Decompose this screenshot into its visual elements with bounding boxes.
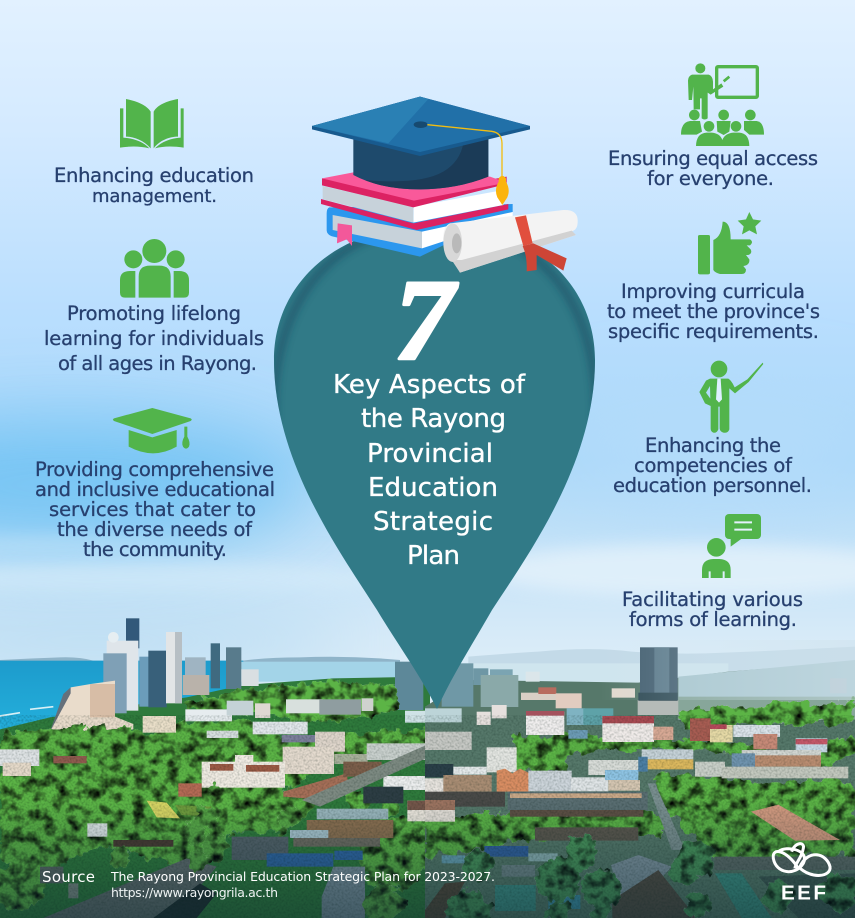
logo: EEF [773, 844, 830, 904]
text: promoting lifelong learning: of all ages in Rayong. [58, 352, 257, 375]
red ribbon [523, 243, 567, 271]
icon: teacher with audience [681, 63, 764, 147]
text: improving curricula: to meet the province's [607, 300, 820, 323]
text: comprehensive educational services: Providing comprehensive [35, 458, 274, 481]
text: improving curricula: specific requirements. [608, 320, 819, 343]
icon: graduation cap [113, 408, 192, 453]
right column [607, 63, 820, 631]
text: promoting lifelong learning [44, 302, 264, 375]
source note: Source [42, 868, 95, 886]
tassel [427, 125, 502, 177]
pin title [333, 370, 526, 571]
bottom trees [446, 837, 855, 918]
text: improving curricula [607, 280, 820, 343]
blue book [327, 204, 513, 257]
pin title: Strategic [373, 507, 493, 537]
text: comprehensive educational services: the diverse needs of [57, 518, 253, 541]
pin title: Plan [407, 541, 460, 571]
cap base [353, 138, 488, 189]
pin title: the Rayong [361, 404, 506, 434]
text: facilitating learning [622, 588, 803, 631]
pin title: Key Aspects of [333, 370, 526, 400]
panel: central map pin [274, 225, 596, 709]
text: enhancing competencies [613, 434, 812, 497]
near buildings [143, 716, 176, 733]
pink book [321, 172, 508, 230]
text: ensuring equal access [608, 147, 818, 190]
text: enhancing competencies: competencies of [634, 454, 793, 477]
text: promoting lifelong learning: learning for individuals [44, 327, 264, 350]
text: enhancing competencies: Enhancing the [645, 434, 781, 457]
text: enhancing competencies: education personnel. [613, 474, 812, 497]
illustration: cap, books and diploma [312, 97, 578, 273]
source note: The Rayong Provincial Education Strategic Plan for 2023-2027. [110, 869, 495, 884]
icon: open book [120, 99, 184, 148]
near trees [109, 785, 404, 918]
text: facilitating learning: forms of learning. [629, 608, 797, 631]
text: promoting lifelong learning: Promoting lifelong [67, 302, 241, 325]
right half of the city [425, 647, 855, 918]
text: facilitating learning: Facilitating various [622, 588, 803, 611]
icon: thumbs up with star [698, 212, 761, 274]
far tree line [0, 682, 437, 912]
text: enhancing education management [54, 164, 254, 207]
text: comprehensive educational services: services that cater to [49, 498, 256, 521]
city photo [0, 618, 855, 918]
mid and far trees [425, 700, 855, 858]
pin title: Provincial [367, 439, 493, 469]
pin title: Education [368, 473, 498, 503]
text: ensuring equal access: for everyone. [647, 167, 774, 190]
source note: https://www.rayongrila.ac.th [111, 885, 278, 900]
left half of the city [0, 618, 437, 918]
text: enhancing education management: management. [92, 186, 217, 207]
text: comprehensive educational services [35, 458, 275, 561]
icon: instructor with pointer [699, 361, 763, 433]
big number 7: 7 [394, 257, 458, 385]
icon: person with speech bubble [702, 514, 761, 578]
text: enhancing education management: Enhancing education [54, 164, 254, 187]
source note [42, 868, 495, 900]
towers [126, 618, 139, 648]
text: comprehensive educational services: the community. [83, 538, 227, 561]
cap board [312, 97, 530, 156]
text: improving curricula: Improving curricula [621, 280, 805, 303]
logo: EEF: EEF [781, 881, 826, 904]
diploma scroll [443, 210, 578, 273]
text: ensuring equal access: Ensuring equal access [608, 147, 818, 170]
text: comprehensive educational services: and inclusive educational [35, 478, 275, 501]
icon: group of people [120, 239, 189, 298]
left column [35, 99, 275, 561]
